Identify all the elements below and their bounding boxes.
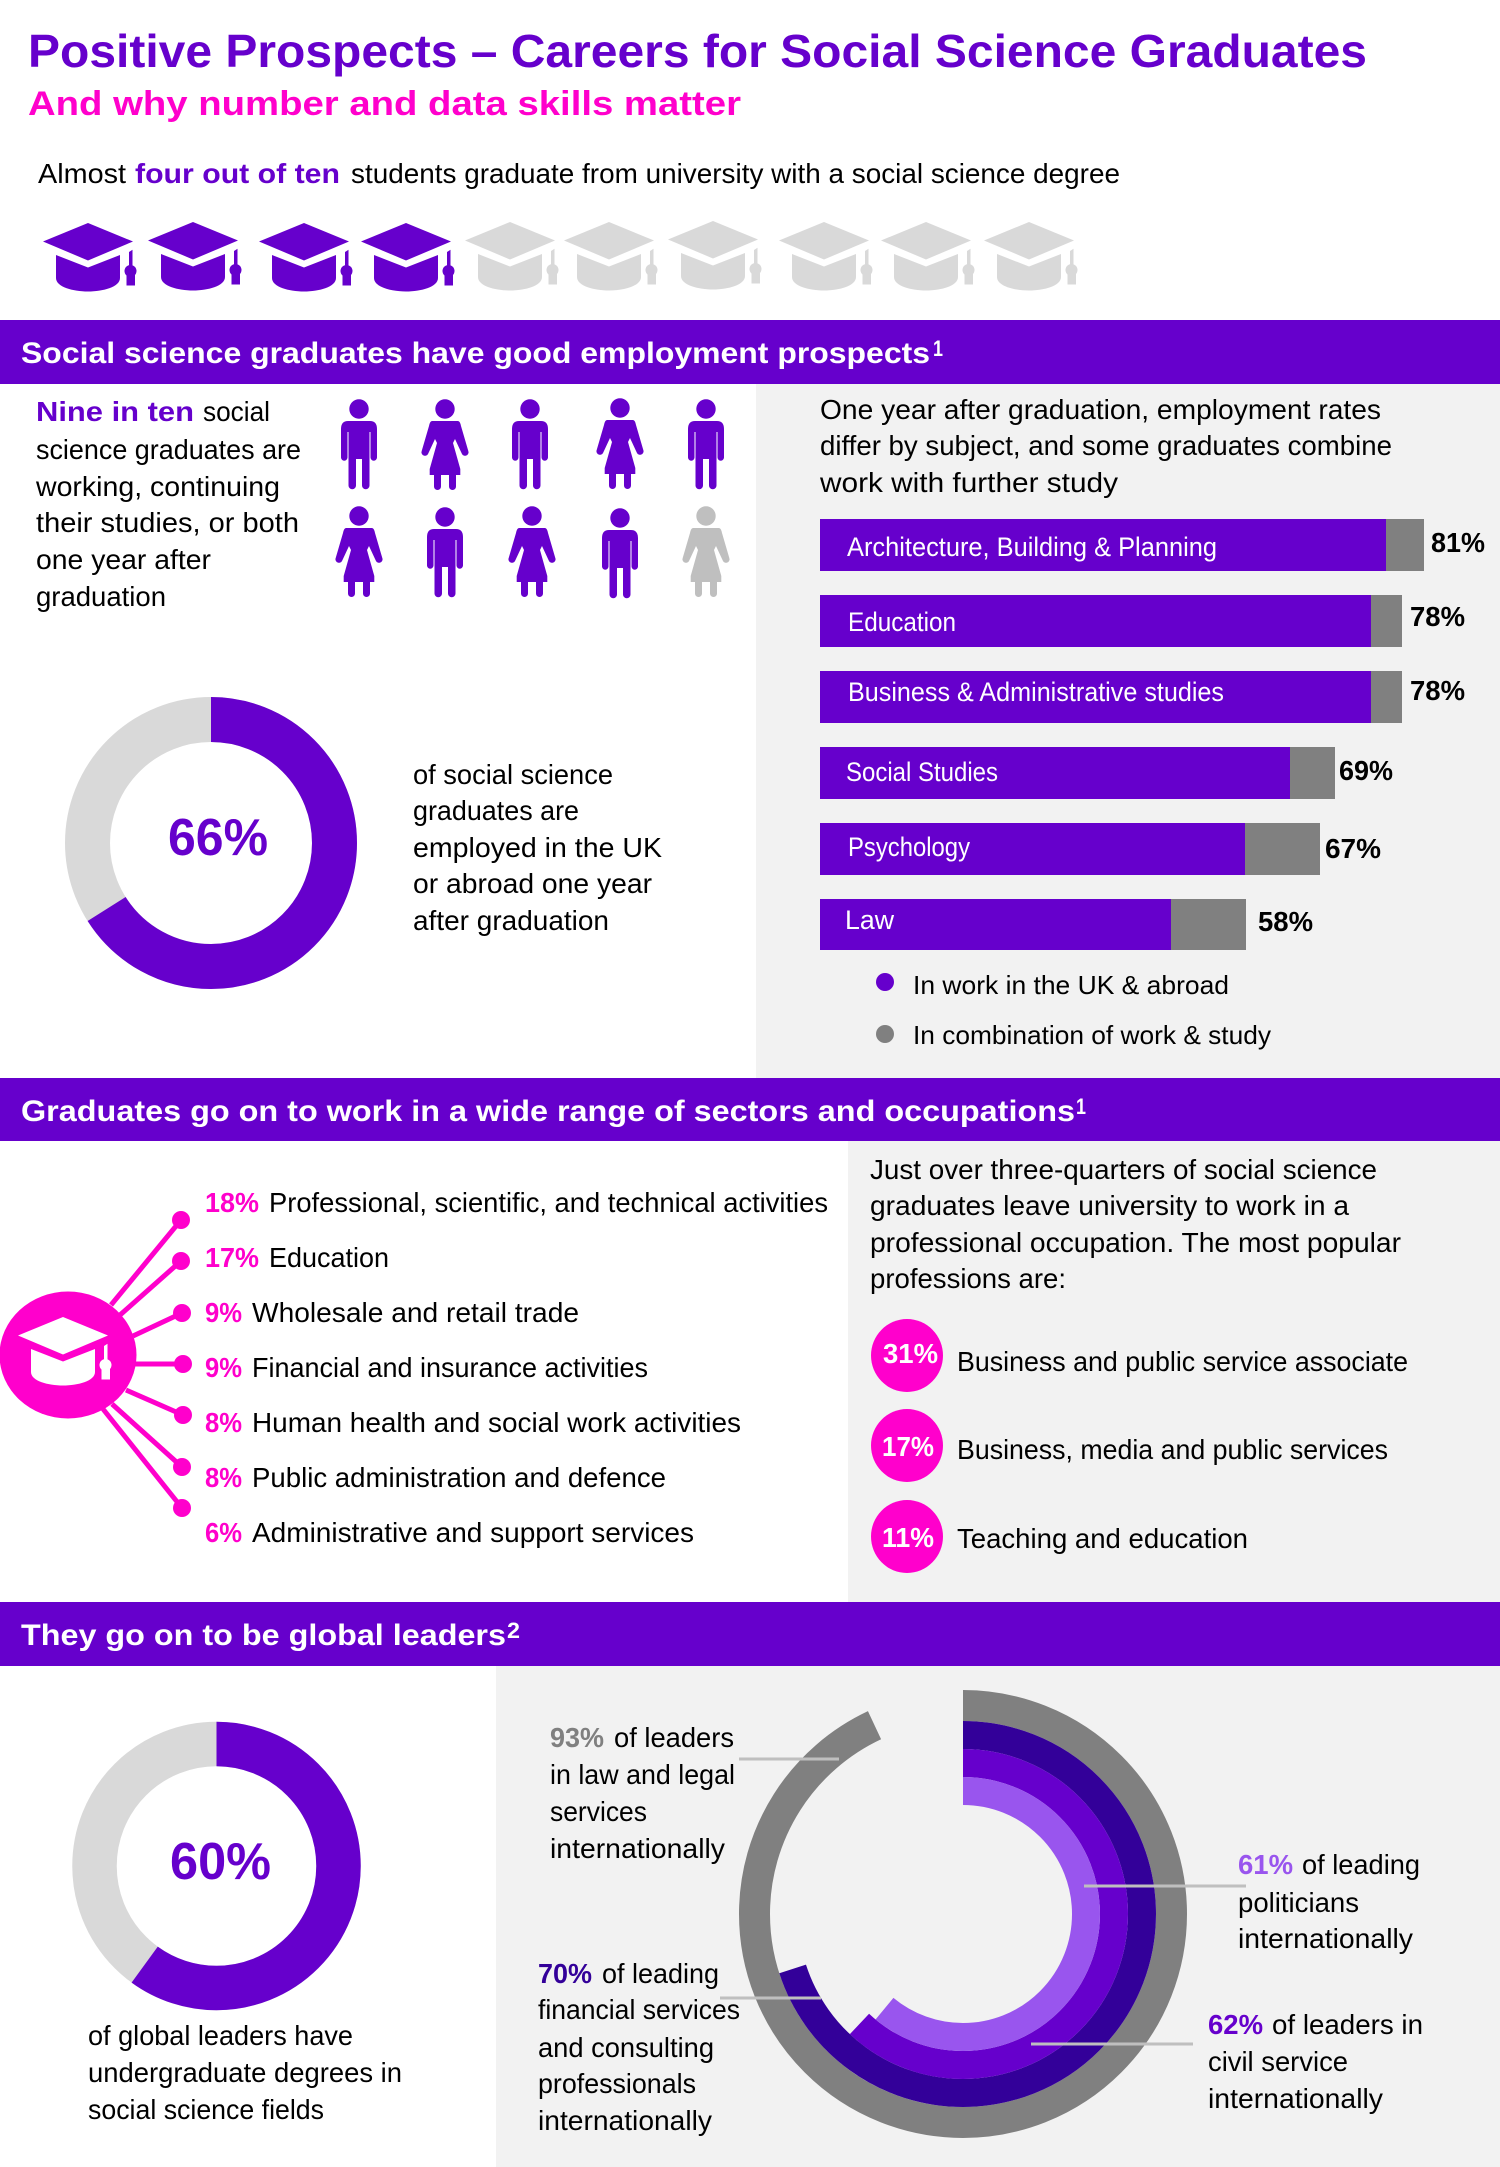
text block: nine in ten: social: [203, 396, 270, 427]
bar: social studies: Social Studies: [846, 757, 998, 787]
panel: subject employment rates background: [756, 384, 1500, 1078]
bar: social studies: [820, 747, 1393, 799]
section banner: employment prospects: Social science graduates have good employment prospects: [21, 337, 930, 370]
intro statement: Almost: [38, 158, 126, 189]
section banner: sectors and occupations: [0, 1078, 1500, 1141]
text block: global leaders degrees: social science fields: [88, 2094, 324, 2125]
text block: nine in ten: working, continuing: [35, 471, 280, 502]
text block: employment rates by subject: work with further study: [819, 467, 1118, 498]
text block: employed one year after graduation: [413, 759, 662, 936]
callout: 93 percent law: internationally: [550, 1833, 725, 1864]
callout: 93 percent law: 93%: [550, 1722, 604, 1753]
bar: law: 58%: [1258, 906, 1313, 937]
bar: business and administrative studies: [820, 671, 1465, 723]
text block: global leaders degrees: [88, 2020, 402, 2125]
callout: 62 percent civil service: of leaders in: [1272, 2009, 1423, 2040]
bar: law: Law: [845, 905, 894, 935]
text block: employment rates by subject: [819, 394, 1392, 498]
panel: leaders radial chart background: [496, 1666, 1500, 2167]
stat: 17 percent business, media and public services: [871, 1409, 1388, 1482]
bar: education: [820, 595, 1465, 647]
text block: employed one year after graduation: or abroad one year: [413, 868, 652, 899]
intro statement: students graduate from university with a social science degree: [351, 158, 1120, 189]
panel: professions background: [848, 1141, 1500, 1602]
donut chart: 60 percent of global leaders: [94, 1744, 338, 1988]
list: sector percentages: Administrative and support services: [252, 1517, 694, 1548]
icon row: ten graduation caps, four highlighted: [43, 221, 1078, 292]
stat: 11 percent teaching and education: 11%: [882, 1522, 934, 1553]
list: sector percentages: 6%: [205, 1517, 242, 1548]
list: sector percentages: [205, 1187, 828, 1548]
bar: education: 78%: [1410, 601, 1465, 632]
callout: 62 percent civil service: civil service: [1208, 2046, 1348, 2077]
stat: 17 percent business, media and public services: 17%: [882, 1431, 934, 1462]
text block: nine in ten: one year after: [36, 544, 211, 575]
callout: 70 percent financial services: internationally: [538, 2105, 712, 2136]
list: sector percentages: 17%: [205, 1242, 259, 1273]
list: sector percentages: 9%: [205, 1297, 242, 1328]
bar: architecture: [820, 519, 1485, 571]
text block: nine in ten: science graduates are: [36, 434, 301, 465]
donut chart: 60 percent of global leaders: 60%: [170, 1833, 271, 1891]
bar: architecture: 81%: [1431, 527, 1485, 558]
callout: 62 percent civil service: 62%: [1208, 2009, 1263, 2040]
bar: business and administrative studies: 78%: [1410, 675, 1465, 706]
icon grid: ten people, nine highlighted: [335, 398, 730, 598]
list: sector percentages: Human health and social work activities: [252, 1407, 741, 1438]
text block: global leaders degrees: undergraduate degrees in: [88, 2057, 402, 2088]
text block: nine in ten: their studies, or both: [36, 507, 299, 538]
bar: psychology: 67%: [1325, 833, 1381, 864]
text block: professional occupations: professional occupation. The most popular: [870, 1227, 1401, 1258]
legend: [876, 970, 1271, 1050]
section banner: sectors and occupations: 1: [1076, 1094, 1086, 1119]
text block: employment rates by subject: One year after graduation, employment rates: [820, 394, 1381, 425]
legend: In combination of work & study: [913, 1020, 1271, 1050]
callout: 93 percent law: [550, 1722, 735, 1864]
list: sector percentages: Wholesale and retail trade: [252, 1297, 579, 1328]
stat: 31 percent business and public service associate: 31%: [883, 1338, 938, 1369]
list: sector percentages: Education: [269, 1242, 389, 1273]
callout: 93 percent law: in law and legal: [550, 1759, 735, 1790]
text block: professional occupations: professions are:: [870, 1263, 1066, 1294]
list: sector percentages: 8%: [205, 1462, 242, 1493]
text block: professional occupations: graduates leave university to work in a: [870, 1190, 1349, 1221]
bar: psychology: [820, 823, 1381, 875]
callout: 70 percent financial services: [538, 1958, 740, 2136]
legend: In work in the UK & abroad: [913, 970, 1229, 1000]
section banner: global leaders: They go on to be global leaders: [21, 1619, 506, 1652]
text block: nine in ten: [35, 396, 301, 612]
radial chart: leaders by field: [720, 1706, 1246, 2122]
callout: 61 percent politicians: of leading: [1302, 1849, 1420, 1880]
callout: 62 percent civil service: [1208, 2009, 1423, 2114]
section banner: global leaders: 2: [507, 1618, 520, 1643]
text block: professional occupations: Just over three-quarters of social science: [870, 1154, 1377, 1185]
list: sector percentages: 8%: [205, 1407, 242, 1438]
text block: employed one year after graduation: after graduation: [413, 905, 609, 936]
section banner: sectors and occupations: Graduates go on to work in a wide range of sectors and occupations: [21, 1095, 1075, 1128]
stat: 11 percent teaching and education: Teaching and education: [957, 1523, 1248, 1554]
stat: 11 percent teaching and education: [871, 1500, 1248, 1573]
text block: global leaders degrees: of global leaders have: [88, 2020, 353, 2051]
list: sector percentages: Professional, scientific, and technical activities: [269, 1187, 828, 1218]
bar: education: Education: [848, 607, 956, 637]
section banner: employment prospects: 1: [933, 336, 943, 361]
hub diagram: graduate sectors spokes: [0, 1211, 192, 1517]
list: sector percentages: Public administration and defence: [252, 1462, 666, 1493]
bar: social studies: 69%: [1339, 755, 1393, 786]
title: Positive Prospects – Careers for Social Science Graduates: [28, 25, 1367, 77]
callout: 70 percent financial services: 70%: [538, 1958, 592, 1989]
callout: 61 percent politicians: politicians: [1238, 1887, 1359, 1918]
callout: 70 percent financial services: and consulting: [538, 2032, 714, 2063]
callout: 70 percent financial services: financial services: [538, 1994, 740, 2025]
text block: professional occupations: [870, 1154, 1401, 1294]
bar: law: [820, 899, 1313, 950]
bar: architecture: Architecture, Building & Planning: [847, 532, 1217, 562]
stat: 31 percent business and public service associate: Business and public service associate: [957, 1346, 1408, 1377]
bar: psychology: Psychology: [848, 832, 970, 862]
callout: 61 percent politicians: 61%: [1238, 1849, 1293, 1880]
list: sector percentages: 18%: [205, 1187, 259, 1218]
callout: 70 percent financial services: professionals: [538, 2068, 696, 2099]
callout: 61 percent politicians: internationally: [1238, 1923, 1413, 1954]
donut chart: 66 percent employed: 66%: [168, 809, 268, 867]
list: sector percentages: 9%: [205, 1352, 242, 1383]
callout: 93 percent law: of leaders: [614, 1722, 734, 1753]
subtitle: And why number and data skills matter: [28, 85, 741, 123]
stat: 17 percent business, media and public services: Business, media and public services: [957, 1434, 1388, 1465]
callout: 62 percent civil service: internationally: [1208, 2083, 1383, 2114]
bar: business and administrative studies: Business & Administrative studies: [848, 677, 1224, 707]
list: sector percentages: Financial and insurance activities: [252, 1352, 648, 1383]
stat: 31 percent business and public service associate: [871, 1319, 1408, 1392]
text block: employed one year after graduation: graduates are: [413, 795, 579, 826]
section banner: employment prospects: [0, 320, 1500, 384]
text block: employed one year after graduation: employed in the UK: [413, 832, 662, 863]
text block: nine in ten: Nine in ten: [36, 396, 194, 427]
callout: 93 percent law: services: [550, 1796, 647, 1827]
text block: employed one year after graduation: of social science: [413, 759, 613, 790]
text block: nine in ten: graduation: [36, 581, 166, 612]
intro statement: four out of ten: [135, 158, 340, 189]
callout: 61 percent politicians: [1238, 1849, 1420, 1954]
callout: 70 percent financial services: of leading: [602, 1958, 719, 1989]
bar chart: employment rate by subject: [820, 519, 1485, 950]
section banner: global leaders: [0, 1602, 1500, 1666]
text block: employment rates by subject: differ by subject, and some graduates combine: [820, 430, 1392, 461]
donut chart: 66 percent employed: [88, 720, 334, 966]
